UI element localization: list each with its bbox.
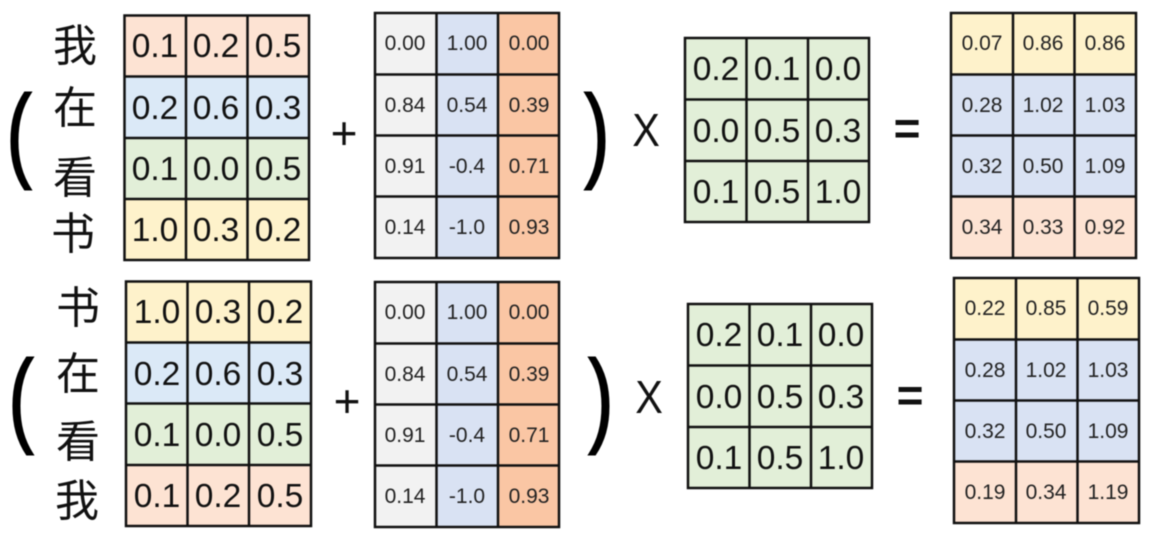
- positional encoding matrix: 0.00: [509, 301, 549, 324]
- right parenthesis: ): [589, 340, 613, 456]
- word labels: shu zai kan wo: 我: [55, 477, 99, 526]
- result matrix: 0.19: [965, 481, 1005, 504]
- word labels: wo zai kan shu: 在: [53, 84, 97, 133]
- word embedding matrix: 0.2: [257, 294, 303, 331]
- positional encoding matrix: 0.91: [385, 155, 425, 178]
- weight matrix: 0.1: [693, 174, 739, 211]
- word embedding matrix: 0.3: [257, 356, 303, 393]
- positional encoding matrix: 0.54: [447, 94, 488, 117]
- word embedding matrix: 0.2: [255, 212, 301, 249]
- positional encoding matrix: -0.4: [449, 424, 485, 447]
- result matrix: [951, 13, 1136, 258]
- word embedding matrix: 0.5: [255, 151, 301, 188]
- weight matrix: 1.0: [818, 440, 864, 477]
- positional encoding matrix: 0.84: [385, 94, 426, 117]
- result matrix: 1.09: [1088, 420, 1128, 443]
- result matrix: [954, 278, 1139, 523]
- weight matrix: 0.3: [815, 113, 861, 150]
- multiply sign: X: [635, 372, 663, 424]
- result matrix: 0.33: [1023, 216, 1063, 239]
- word embedding matrix: 0.3: [255, 90, 301, 127]
- word embedding matrix: 0.1: [134, 478, 180, 515]
- word labels: wo zai kan shu: 看: [53, 154, 97, 203]
- plus sign: +: [334, 375, 360, 427]
- result matrix: 0.34: [962, 216, 1003, 239]
- multiply sign: X: [632, 105, 660, 157]
- result matrix: 0.32: [965, 420, 1005, 443]
- result matrix: 0.28: [962, 94, 1002, 117]
- word embedding matrix: 0.2: [195, 478, 241, 515]
- result matrix: 1.03: [1085, 94, 1125, 117]
- word embedding matrix: 0.3: [195, 294, 241, 331]
- positional encoding matrix: 0.93: [509, 485, 549, 508]
- word embedding matrix: 0.2: [193, 28, 239, 65]
- result matrix: 0.85: [1026, 297, 1066, 320]
- weight matrix: 0.5: [757, 379, 803, 416]
- left parenthesis: (: [9, 340, 33, 456]
- weight matrix: 1.0: [815, 174, 861, 211]
- positional encoding matrix: 0.14: [385, 216, 426, 239]
- word labels: shu zai kan wo: [55, 284, 100, 526]
- word embedding matrix: 0.1: [132, 151, 178, 188]
- positional encoding matrix: 0.39: [509, 363, 549, 386]
- positional encoding matrix: 0.71: [509, 424, 549, 447]
- weight matrix: [688, 304, 872, 488]
- result matrix: 1.02: [1023, 94, 1063, 117]
- result matrix: 0.59: [1088, 297, 1128, 320]
- result matrix: 0.50: [1023, 155, 1063, 178]
- positional encoding matrix: 0.00: [385, 301, 425, 324]
- word embedding matrix: 0.6: [193, 90, 239, 127]
- positional encoding matrix: 1.00: [447, 32, 487, 55]
- result matrix: 1.19: [1088, 481, 1128, 504]
- positional encoding matrix: [375, 13, 559, 258]
- result matrix: 1.02: [1026, 359, 1066, 382]
- equals sign: =: [894, 102, 920, 154]
- word embedding matrix: 0.5: [255, 28, 301, 65]
- positional encoding matrix: 0.91: [385, 424, 425, 447]
- word embedding matrix: 0.5: [257, 478, 303, 515]
- weight matrix: 0.0: [818, 317, 864, 354]
- positional encoding matrix: -1.0: [449, 216, 485, 239]
- word embedding matrix: 0.3: [193, 212, 239, 249]
- result matrix: 1.03: [1088, 359, 1128, 382]
- word embedding matrix: 0.0: [195, 417, 241, 454]
- result matrix: 0.86: [1023, 32, 1063, 55]
- weight matrix: 0.0: [696, 379, 742, 416]
- result matrix: 0.28: [965, 359, 1005, 382]
- positional encoding matrix: -0.4: [449, 155, 485, 178]
- result matrix: 0.22: [965, 297, 1005, 320]
- positional encoding matrix: -1.0: [449, 485, 485, 508]
- word embedding matrix: [124, 15, 309, 260]
- weight matrix: 0.1: [696, 440, 742, 477]
- plus sign: +: [331, 107, 357, 159]
- positional encoding matrix: 0.00: [385, 32, 425, 55]
- positional encoding matrix: [375, 282, 559, 527]
- weight matrix: 0.5: [754, 174, 800, 211]
- equation two: [9, 278, 1139, 527]
- weight matrix: 0.0: [815, 51, 861, 88]
- word labels: shu zai kan wo: 在: [56, 350, 100, 399]
- weight matrix: 0.5: [754, 113, 800, 150]
- equals sign: =: [897, 369, 923, 421]
- result matrix: 0.92: [1085, 216, 1125, 239]
- positional encoding matrix: 1.00: [447, 301, 487, 324]
- right parenthesis: ): [585, 75, 609, 191]
- word embedding matrix: 1.0: [134, 294, 180, 331]
- result matrix: 0.86: [1085, 32, 1125, 55]
- weight matrix: 0.2: [696, 317, 742, 354]
- weight matrix: 0.1: [754, 51, 800, 88]
- weight matrix: 0.5: [757, 440, 803, 477]
- word embedding matrix: 1.0: [132, 212, 178, 249]
- word labels: shu zai kan wo: 看: [56, 418, 100, 467]
- weight matrix: 0.1: [757, 317, 803, 354]
- word labels: wo zai kan shu: 书: [51, 210, 95, 259]
- left parenthesis: (: [7, 75, 31, 191]
- word embedding matrix: 0.1: [132, 28, 178, 65]
- word labels: shu zai kan wo: 书: [56, 284, 100, 333]
- word embedding matrix: 0.1: [134, 417, 180, 454]
- positional encoding matrix: 0.93: [509, 216, 549, 239]
- equation one: [7, 13, 1136, 260]
- result matrix: 0.32: [962, 155, 1002, 178]
- positional encoding matrix: 0.00: [509, 32, 549, 55]
- result matrix: 0.34: [1026, 481, 1067, 504]
- word embedding matrix: [126, 281, 311, 526]
- word embedding matrix: 0.2: [132, 90, 178, 127]
- weight matrix: [685, 38, 869, 222]
- weight matrix: 0.3: [818, 379, 864, 416]
- positional encoding matrix: 0.84: [385, 363, 426, 386]
- weight matrix: 0.2: [693, 51, 739, 88]
- word embedding matrix: 0.0: [193, 151, 239, 188]
- result matrix: 0.50: [1026, 420, 1066, 443]
- positional encoding matrix: 0.39: [509, 94, 549, 117]
- word embedding matrix: 0.5: [257, 417, 303, 454]
- word embedding matrix: 0.6: [195, 356, 241, 393]
- weight matrix: 0.0: [693, 113, 739, 150]
- word labels: wo zai kan shu: [51, 22, 97, 259]
- result matrix: 0.07: [962, 32, 1002, 55]
- positional encoding matrix: 0.14: [385, 485, 426, 508]
- word labels: wo zai kan shu: 我: [53, 22, 97, 71]
- word embedding matrix: 0.2: [134, 356, 180, 393]
- positional encoding matrix: 0.54: [447, 363, 488, 386]
- result matrix: 1.09: [1085, 155, 1125, 178]
- positional encoding matrix: 0.71: [509, 155, 549, 178]
